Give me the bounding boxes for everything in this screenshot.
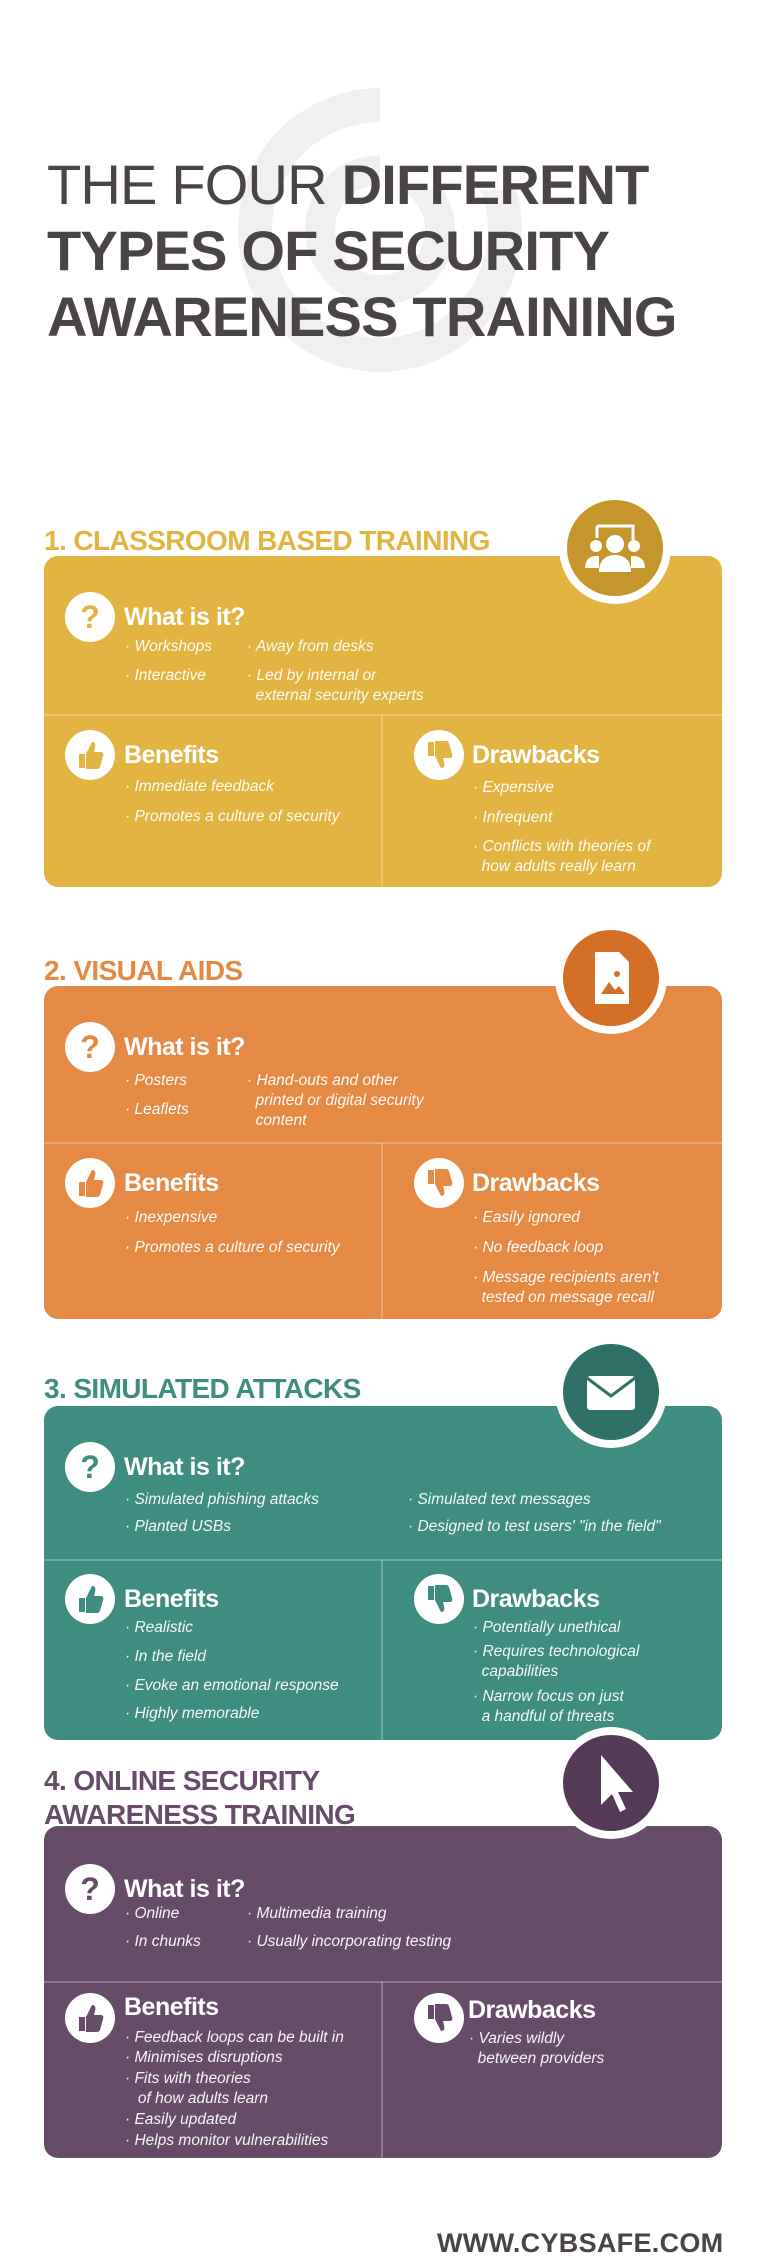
panel: classroom: · Promotes a culture of security xyxy=(125,808,340,825)
panel: classroom: Benefits xyxy=(124,741,219,769)
section title 4 xyxy=(44,1765,355,1830)
panel: visual aids: · Easily ignored xyxy=(473,1209,580,1226)
panel: visual aids: content xyxy=(256,1112,306,1129)
icon: thumbs up xyxy=(65,1158,115,1208)
panel: visual aids: · Message recipients aren't xyxy=(473,1269,659,1286)
section title 4: 4. ONLINE SECURITY xyxy=(44,1765,319,1796)
panel: classroom: · Expensive xyxy=(473,779,554,796)
panel: simulated attacks: capabilities xyxy=(482,1663,558,1680)
icon: classroom xyxy=(559,492,671,604)
panel: simulated attacks: · Planted USBs xyxy=(125,1518,231,1535)
icon: thumbs down xyxy=(414,730,464,780)
section title 2: 2. VISUAL AIDS xyxy=(44,955,243,986)
panel: online: · In chunks xyxy=(125,1933,201,1950)
panel: simulated attacks xyxy=(44,1406,722,1740)
panel: online: What is it? xyxy=(124,1875,245,1903)
panel: simulated attacks: · In the field xyxy=(125,1648,206,1665)
icon: question: ? xyxy=(80,1029,100,1065)
panel: visual aids: printed or digital security xyxy=(256,1092,424,1109)
panel: simulated attacks: · Highly memorable xyxy=(125,1705,259,1722)
panel: simulated attacks: · Simulated text messages xyxy=(408,1491,591,1508)
icon: thumbs up xyxy=(65,730,115,780)
panel: simulated attacks: Benefits xyxy=(124,1585,219,1613)
panel: simulated attacks: · Potentially unethical xyxy=(473,1619,620,1636)
panel: classroom xyxy=(44,556,722,887)
panel: online: · Easily updated xyxy=(125,2111,236,2128)
panel: classroom: What is it? xyxy=(124,603,245,631)
panel: simulated attacks: · Requires technological xyxy=(473,1643,639,1660)
icon: thumbs up xyxy=(65,1993,115,2043)
icon: thumbs down xyxy=(414,1993,464,2043)
icon: question: ? xyxy=(80,1449,100,1485)
section title 3: 3. SIMULATED ATTACKS xyxy=(44,1373,361,1404)
icon: question: ? xyxy=(80,599,100,635)
icon: question xyxy=(65,592,115,642)
panel: visual aids: · Posters xyxy=(125,1072,187,1089)
panel: classroom: · Immediate feedback xyxy=(125,778,274,795)
panel: simulated attacks: Drawbacks xyxy=(472,1585,600,1613)
background logo xyxy=(238,88,522,372)
panel: visual aids: Drawbacks xyxy=(472,1169,600,1197)
section title 1: 1. CLASSROOM BASED TRAINING xyxy=(44,525,490,556)
icon: question: ? xyxy=(80,1871,100,1907)
icon: thumbs down xyxy=(414,1574,464,1624)
panel: classroom: Drawbacks xyxy=(472,741,600,769)
panel: classroom: how adults really learn xyxy=(482,858,636,875)
section title 4: AWARENESS TRAINING xyxy=(44,1799,355,1830)
panel: online: · Multimedia training xyxy=(247,1905,387,1922)
panel: online xyxy=(44,1826,722,2158)
panel: simulated attacks: a handful of threats xyxy=(482,1708,614,1725)
panel: visual aids: · Hand-outs and other xyxy=(247,1072,398,1089)
panel: visual aids: What is it? xyxy=(124,1033,245,1061)
panel: classroom: · Conflicts with theories of xyxy=(473,838,650,855)
panel: online: Benefits xyxy=(124,1993,219,2021)
icon: document xyxy=(555,922,667,1034)
title: AWARENESS TRAINING xyxy=(47,285,677,348)
panel: visual aids xyxy=(44,986,722,1319)
panel: online: · Fits with theories xyxy=(125,2070,251,2087)
icon: cursor xyxy=(555,1727,667,1839)
panel: classroom: · Workshops xyxy=(125,638,212,655)
panel: online: · Helps monitor vulnerabilities xyxy=(125,2132,328,2149)
icon: envelope xyxy=(555,1336,667,1448)
title: TYPES OF SECURITY xyxy=(47,219,609,282)
panel: simulated attacks: · Designed to test users' "in the field" xyxy=(408,1518,661,1535)
panel: simulated attacks: · Simulated phishing attacks xyxy=(125,1491,319,1508)
panel: classroom: external security experts xyxy=(256,687,424,704)
panel: online: · Varies wildly xyxy=(469,2030,564,2047)
icon: thumbs down xyxy=(414,1158,464,1208)
panel: simulated attacks: · Realistic xyxy=(125,1619,193,1636)
panel: visual aids: · No feedback loop xyxy=(473,1239,603,1256)
panel: online: · Feedback loops can be built in xyxy=(125,2029,344,2046)
panel: online: · Online xyxy=(125,1905,179,1922)
panel: online: · Usually incorporating testing xyxy=(247,1933,451,1950)
panel: visual aids: Benefits xyxy=(124,1169,219,1197)
title xyxy=(47,153,677,348)
icon: thumbs up xyxy=(65,1574,115,1624)
title: THE FOUR DIFFERENT xyxy=(47,153,649,216)
panel: online: · Minimises disruptions xyxy=(125,2049,283,2066)
panel: online: between providers xyxy=(478,2050,604,2067)
icon: question xyxy=(65,1442,115,1492)
panel: visual aids: tested on message recall xyxy=(482,1289,654,1306)
panel: classroom: · Led by internal or xyxy=(247,667,376,684)
panel: classroom: · Away from desks xyxy=(247,638,374,655)
panel: classroom: · Infrequent xyxy=(473,809,552,826)
panel: simulated attacks: What is it? xyxy=(124,1453,245,1481)
footer url: WWW.CYBSAFE.COM xyxy=(437,2228,723,2258)
panel: visual aids: · Inexpensive xyxy=(125,1209,217,1226)
panel: online: of how adults learn xyxy=(138,2090,268,2107)
panel: simulated attacks: · Evoke an emotional response xyxy=(125,1677,339,1694)
panel: simulated attacks: · Narrow focus on just xyxy=(473,1688,624,1705)
panel: visual aids: · Promotes a culture of security xyxy=(125,1239,340,1256)
icon: question xyxy=(65,1022,115,1072)
panel: online: Drawbacks xyxy=(468,1996,596,2024)
icon: question xyxy=(65,1864,115,1914)
panel: classroom: · Interactive xyxy=(125,667,206,684)
panel: visual aids: · Leaflets xyxy=(125,1101,189,1118)
